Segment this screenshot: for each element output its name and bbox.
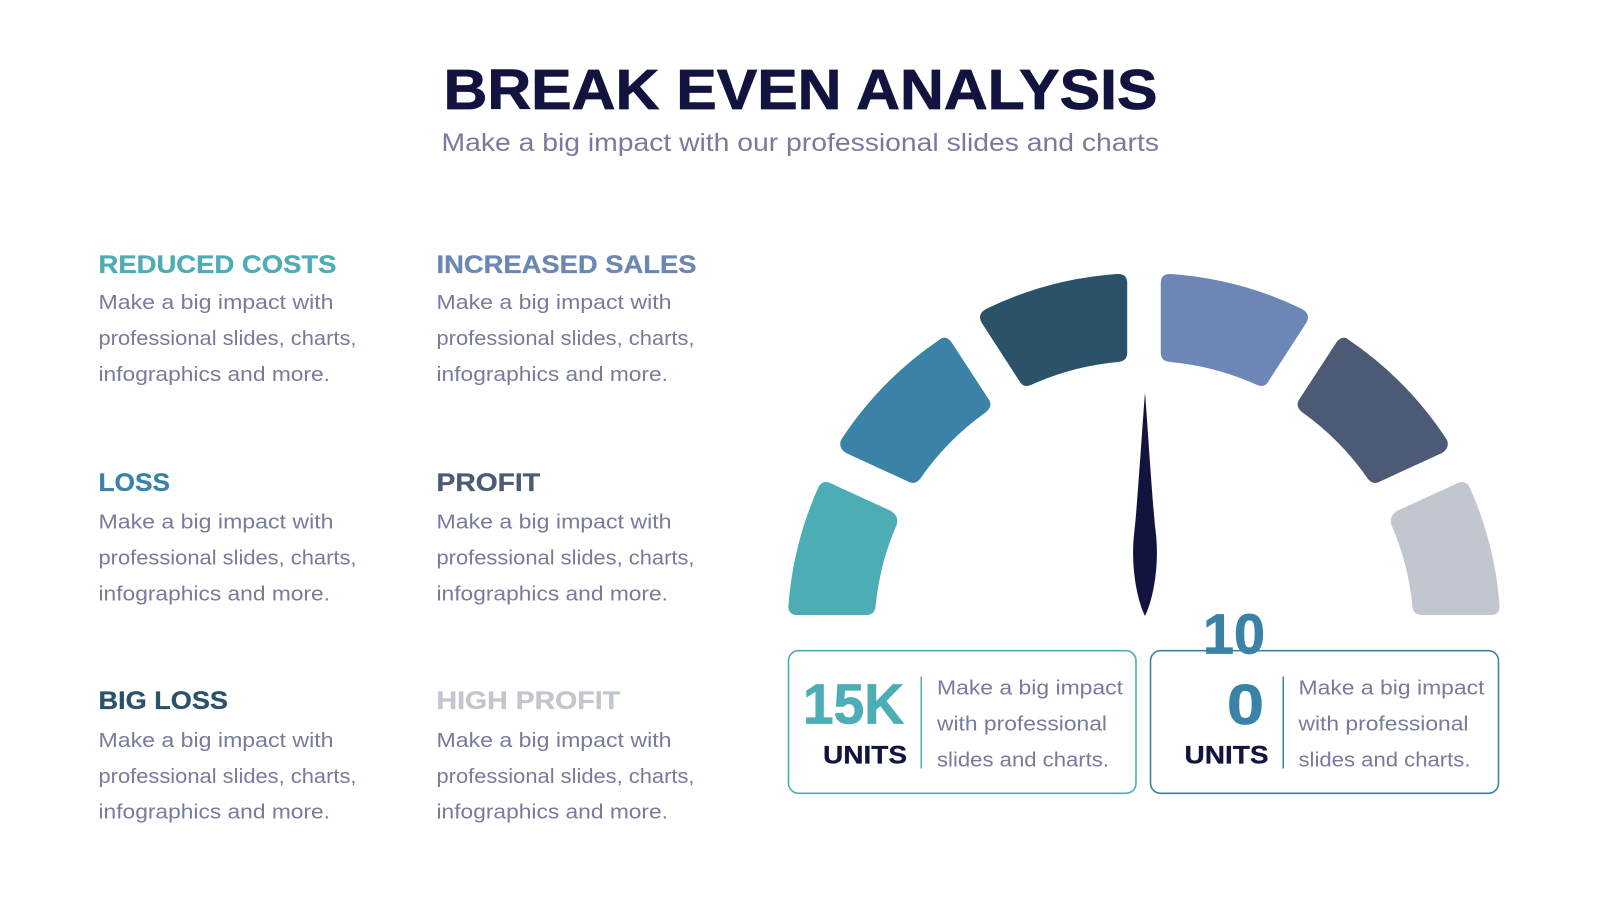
box outline — [1150, 651, 1498, 793]
gauge segment: reduced costs — [788, 482, 897, 615]
description: increased sales — [436, 291, 694, 386]
value: 0 — [1227, 673, 1264, 737]
description: high profit: infographics and more. — [436, 800, 668, 824]
description: loss: Make a big impact with — [98, 511, 334, 534]
value — [1203, 602, 1265, 737]
text block: loss — [98, 469, 356, 606]
description: loss: infographics and more. — [98, 583, 330, 606]
description: increased sales: infographics and more. — [436, 363, 668, 386]
subtitle: Make a big impact with our professional slides and charts — [442, 129, 1159, 157]
description: profit — [436, 511, 694, 606]
description: Make a big impact — [1298, 677, 1485, 700]
description: Make a big impact — [937, 677, 1123, 700]
description: high profit: professional slides, charts, — [436, 765, 694, 788]
text block: profit — [436, 469, 694, 606]
description — [936, 677, 1123, 772]
stat box: 15k units — [788, 651, 1136, 793]
gauge chart — [788, 274, 1500, 616]
description: slides and charts. — [1298, 749, 1470, 772]
description: loss: professional slides, charts, — [98, 547, 356, 570]
title: BREAK EVEN ANALYSIS — [444, 58, 1158, 122]
description: increased sales: Make a big impact with — [436, 291, 672, 314]
text block: high profit — [436, 687, 694, 824]
value: 10 — [1203, 602, 1265, 666]
gauge segment: high profit — [1391, 482, 1500, 615]
unit label: UNITS — [823, 742, 907, 770]
description: profit: infographics and more. — [436, 583, 668, 606]
description — [1297, 677, 1485, 772]
description: with professional — [936, 713, 1107, 736]
heading: big loss: BIG LOSS — [98, 687, 228, 715]
description: increased sales: professional slides, charts, — [436, 327, 694, 350]
description: profit: professional slides, charts, — [436, 547, 694, 570]
gauge segment: profit — [1298, 338, 1448, 483]
gauge needle — [1133, 393, 1157, 616]
heading: loss: LOSS — [98, 469, 170, 497]
description: big loss — [98, 729, 356, 824]
stat box: 100 units — [1150, 602, 1498, 793]
description: slides and charts. — [937, 749, 1109, 772]
divider — [1282, 676, 1284, 768]
description: profit: Make a big impact with — [436, 511, 672, 534]
description: big loss: professional slides, charts, — [98, 765, 356, 788]
heading: high profit: HIGH PROFIT — [436, 687, 620, 715]
text block: increased sales — [436, 251, 696, 386]
gauge segment: big loss — [980, 274, 1127, 386]
description: reduced costs — [98, 291, 356, 386]
description: loss — [98, 511, 356, 606]
text block: reduced costs — [98, 251, 356, 386]
description: big loss: Make a big impact with — [98, 729, 334, 752]
heading: reduced costs: REDUCED COSTS — [98, 251, 336, 279]
description: reduced costs: Make a big impact with — [98, 291, 334, 314]
unit label: UNITS — [1184, 742, 1268, 770]
description: big loss: infographics and more. — [98, 800, 330, 824]
text block: big loss — [98, 687, 356, 824]
description: reduced costs: professional slides, charts, — [98, 327, 356, 350]
gauge segment: increased sales — [1161, 274, 1308, 386]
heading: profit: PROFIT — [436, 469, 540, 497]
box outline — [788, 651, 1136, 793]
description: with professional — [1297, 713, 1468, 736]
value: 15K — [803, 672, 904, 736]
gauge segment: loss — [840, 338, 990, 483]
description: high profit: Make a big impact with — [436, 729, 672, 752]
description: high profit — [436, 729, 694, 824]
description: reduced costs: infographics and more. — [98, 363, 330, 386]
divider — [920, 676, 922, 768]
heading: increased sales: INCREASED SALES — [436, 251, 696, 279]
